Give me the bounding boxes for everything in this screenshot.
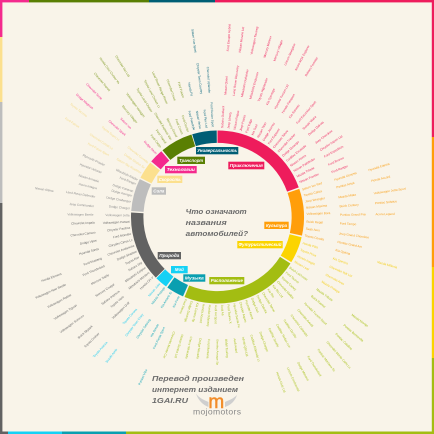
car names: speed (pale yellow): Chevrolet Corvette <box>127 145 150 165</box>
car names: location (green) <box>162 266 369 393</box>
car names: culture (orange): Buick Century <box>339 203 359 208</box>
car names: adventure (pink): Chrysler Aspen Ltd <box>319 134 343 152</box>
car names: transport (olive): Chevrolet Cruze <box>166 79 177 101</box>
car names: transport (olive): Chevrolet Van Ltd <box>114 55 131 78</box>
car names: culture (orange): Toyota Corolla <box>304 234 325 242</box>
car names: adventure (pink): Nissan Murano Ltd <box>238 26 245 53</box>
car names: nature (dark gray): Buick Skylark <box>77 324 94 340</box>
car names: location (green): Honda Accord <box>199 304 206 324</box>
center question: названия <box>186 220 227 227</box>
car names: world (cyan): Toyota Avanza <box>92 341 109 358</box>
car names: location (green): Ford Taurus X <box>226 304 233 324</box>
car names: culture (orange): Volkswagen Bora <box>306 211 331 216</box>
car names: transport (olive): Toyota Land Cruiser <box>135 87 153 113</box>
car names: transport (olive): Ford Cargo <box>149 134 163 149</box>
car names: futuristic (yellow): Nissan Leaf <box>294 260 310 271</box>
car names: speed (pale yellow): Toyota Tacoma <box>69 102 88 118</box>
car names: culture (orange) <box>302 162 406 256</box>
car names: culture (orange): Kia Optima <box>335 248 351 256</box>
car names: adventure (pink): Nissan Rogue <box>233 110 240 130</box>
car names: transport (olive): Land Rover Range Rover <box>151 71 169 105</box>
car names: power (light gray): Nissan Armada <box>78 173 100 183</box>
car names: adventure (pink): Kia Sportage <box>265 87 276 106</box>
car names: location (green): Toyota Camry <box>280 276 298 292</box>
translation credit <box>152 374 245 405</box>
tag: culture: Культура <box>266 223 288 228</box>
car names: location (green): Mazda Tribute <box>315 287 334 302</box>
car names: versatility (dark teal): Saturn Vue Sport <box>190 29 198 53</box>
car names: location (green): Cadillac Eldorado Lt <box>249 334 261 362</box>
car names: location (green): Dodge Monaco <box>296 361 310 382</box>
car names: culture (orange): Pontiac Solstice <box>375 199 397 205</box>
car names: adventure (pink) <box>220 24 348 184</box>
car names: power (light gray): Mitsubishi Raider <box>115 168 139 182</box>
car names: technology (magenta): Dodge Magnum <box>75 93 95 111</box>
car names: versatility (dark teal): Ford Flex Ltd <box>202 109 209 128</box>
tag: versatility: Универсальность <box>197 148 238 153</box>
car names: nature (dark gray): Mercury Sable <box>90 273 110 286</box>
car names: culture (orange): Saab Aero <box>305 227 321 233</box>
car names: futuristic (yellow) <box>294 241 398 294</box>
car names: adventure (pink): Ford Edge <box>245 118 253 133</box>
car names: futuristic (yellow): Honda Insight <box>297 254 316 266</box>
car names: nature (dark gray): Volkswagen New Beetle <box>35 283 67 300</box>
car names: location (green): Pontiac Bonneville <box>342 323 365 343</box>
center question: автомобилей? <box>186 230 249 238</box>
car names: nature (dark gray): Ford Mustang <box>83 256 103 267</box>
logo letter m: m <box>208 392 224 413</box>
car names: music (teal): Kia Amanti Sr <box>160 291 173 309</box>
translation credit: 1GAI.RU <box>152 396 189 405</box>
tag: world: Мой <box>175 267 184 272</box>
car names: nature (dark gray): Volkswagen Golf <box>111 301 131 320</box>
tag: adventure: Приключения <box>230 163 263 168</box>
car names: adventure (pink): Ford Bronco <box>327 156 345 167</box>
car names: world (cyan): Suzuki Aerio <box>105 347 118 364</box>
car names: location (green): Dodge Durango <box>183 301 194 323</box>
car names: speed (pale yellow): Toyota Supra Lt <box>101 125 120 142</box>
center question: Что означают <box>186 209 247 216</box>
car names: versatility (dark teal): Honda Fit <box>187 82 194 96</box>
car names: power (light gray): Nissan Altima <box>35 186 54 193</box>
car names: technology (magenta) <box>75 82 158 155</box>
car names: adventure (pink): Volkswagen Touareg <box>249 26 259 55</box>
car names: transport (olive): Ford Crown <box>174 118 184 135</box>
car names: nature (dark gray): Chevrolet Avalanche <box>107 244 135 257</box>
car names: location (green): BMW Touring <box>224 339 229 358</box>
tag: futuristic: Футуристический <box>238 242 282 247</box>
car names: transport (olive): Chevrolet Express Van <box>153 112 173 141</box>
car names: location (green): Ford Montana <box>206 339 211 359</box>
car names: adventure (pink): Chevrolet Tracker <box>277 133 296 153</box>
car names: location (green): Hyundai Tucson Sport <box>303 302 328 326</box>
car names: location (green): Audi A6 <box>220 305 225 316</box>
car names: adventure (pink): Ford Ranger <box>331 164 348 174</box>
car names: adventure (pink): Kia Sorento <box>288 103 301 119</box>
car names: adventure (pink): Kia Soul <box>250 123 259 136</box>
car names: futuristic (yellow): Chevrolet Aveo <box>325 273 345 286</box>
car names: transport (olive): Mercury Grand <box>165 118 179 138</box>
segmented category ring <box>104 103 331 331</box>
car names: speed (pale yellow): Ford Focus Sport <box>87 142 110 157</box>
car names: nature (dark gray): Subaru Sky <box>127 260 143 272</box>
tag: nature: Природа <box>159 253 180 258</box>
car names: culture (orange): Pontiac Aztek <box>336 181 355 189</box>
car names: location (green): Honda Civic Ltd <box>275 371 287 393</box>
car names: adventure (pink): Land Rover Discovery <box>232 65 240 96</box>
car names: culture (orange): Pontiac Grand Prix <box>340 212 366 217</box>
car names: culture (orange): Honda Accord <box>371 174 391 183</box>
car names: location (green): Kia Rio Ltd <box>271 284 284 299</box>
car names: nature (dark gray): Chevrolet Impala <box>71 221 95 226</box>
car names: world (cyan) <box>92 282 161 364</box>
car names: adventure (pink): Honda Passport <box>281 93 296 114</box>
car names: location (green): Dodge Charger <box>258 331 269 352</box>
car names: speed (pale yellow): Chevrolet Cobalt Ls <box>89 132 114 151</box>
car names: location (green): Pontiac Montana Sv <box>316 348 336 373</box>
car names: adventure (pink): Ford Expedition <box>323 144 344 159</box>
car names: culture (orange): Jeep Grand Cherokee <box>339 231 370 240</box>
car names: adventure (pink): Nissan Frontier <box>299 172 320 184</box>
car names: adventure (pink): Chevrolet Tahoe <box>272 129 289 149</box>
car names: music (teal): Chrysler Sebring <box>135 318 152 339</box>
car names: speed (pale yellow) <box>64 102 150 175</box>
logo wing right <box>225 395 237 407</box>
car names: adventure (pink): Mitsubishi Endeavor <box>248 72 260 99</box>
car names: adventure (pink): Mercury Mariner <box>262 36 273 58</box>
car names: location (green): Chevy Silverado <box>184 336 193 359</box>
car names: adventure (pink): Jeep Liberty <box>226 111 232 129</box>
car names: music (teal): Kia Forte <box>172 295 181 308</box>
car names: adventure (pink): Ford Escape Hybrid <box>226 24 232 51</box>
car names: power (light gray): Dodge Caravan <box>112 183 134 193</box>
car names: power (light gray): Hyundai Veloster <box>79 162 102 174</box>
car names: nature (dark gray): Chrysler Cirrus Lx <box>108 238 133 248</box>
car names: location (green): Chevrolet Aveo5 <box>296 308 314 328</box>
car names: nature (dark gray): Subaru Impreza <box>100 289 121 306</box>
car names: location (green): Infiniti Q50 Ltd <box>241 336 249 357</box>
category tags <box>152 147 289 284</box>
car names: power (light gray): Ford Ranger <box>119 176 137 186</box>
car names: futuristic (yellow): Toyota Prius <box>300 248 317 258</box>
car names: location (green): Lincoln Continental <box>286 367 301 392</box>
car names: location (green): Cadillac Seville <box>267 327 280 348</box>
car names: location (green): Mazda Navajo <box>351 313 369 328</box>
car names: location (green): Chevrolet Tahoe <box>261 291 276 313</box>
car names: location (green): Pontiac Catalina <box>334 332 353 351</box>
car names: adventure (pink): Ford Explorer <box>267 128 281 145</box>
car names: nature (dark gray): Volkswagen Passat <box>103 220 130 225</box>
car names: culture (orange): Pontiac Grand Am <box>337 240 363 249</box>
car names: adventure (pink): Suzuki Vitara <box>302 115 317 131</box>
car names: adventure (pink): Acura MDX Explorer <box>294 45 310 71</box>
car names: nature (dark gray): Volkswagen Scirocco <box>59 313 85 334</box>
car names: location (green): Ford Thunderbolt <box>306 355 323 377</box>
car names: adventure (pink): Nissan Titan <box>256 121 268 139</box>
car names: music (teal): Pontiac Vibe <box>137 368 148 386</box>
car names: nature (dark gray): Volkswagen Rabbit <box>47 293 72 309</box>
mojomotors logo <box>193 392 241 416</box>
tag: speed: Скорость <box>159 177 181 182</box>
car names: adventure (pink): Dodge Dakota <box>307 120 325 137</box>
car names: culture (orange): Toyota Celica <box>303 189 323 197</box>
car names: location (green): Audi A4 Sport <box>214 305 218 324</box>
car names: location (green): Hyundai Azera <box>244 300 255 320</box>
car names: transport (olive): Ford Transit <box>155 129 168 145</box>
car names: nature (dark gray): Honda Element <box>41 272 62 283</box>
car names: nature (dark gray): Ford Thunderbird <box>82 264 106 277</box>
car names: versatility (dark teal): Nissan Versa <box>195 110 202 129</box>
car names: futuristic (yellow): Mazda Protege <box>321 280 341 294</box>
car names: power (light gray): Acura Integra <box>78 182 98 190</box>
car names: nature (dark gray): Toyota Rav <box>124 255 140 266</box>
car names: technology (magenta): Dodge Neon <box>143 140 158 155</box>
car names: power (light gray): Plymouth Prowler <box>82 153 106 167</box>
car names: adventure (pink): Jeep Patriot <box>239 114 247 132</box>
car names: world (cyan): Toyota Corona <box>122 307 138 325</box>
car names: power (light gray): Dodge Avenger <box>111 189 133 198</box>
car names: culture (orange): Ford Tempo <box>340 221 357 226</box>
tag: power: Сила <box>153 188 165 194</box>
car names: versatility (dark teal): Ford Fusion Sport <box>209 102 215 127</box>
car names: location (green): Kia Carens Sp <box>191 302 200 323</box>
car names: adventure (pink): Mercury Villager <box>272 39 284 62</box>
car names: nature (dark gray): Toyota Yaris <box>109 295 125 309</box>
car names: speed (pale yellow): Saturn Sky Roadster <box>116 157 142 175</box>
translation credit: Перевод произведен <box>152 374 245 383</box>
car names: transport (olive): Ford Fusion <box>177 81 185 99</box>
car names: adventure (pink): Nissan Quest <box>223 76 229 95</box>
car names: adventure (pink): Dodge Journey <box>262 121 276 142</box>
car names: adventure (pink): Cadillac Escalade <box>285 144 307 163</box>
car names: power (light gray): Dodge Challenger <box>106 195 131 204</box>
car names: adventure (pink): Mitsubishi Outlander <box>240 69 250 97</box>
car names: transport (olive): Toyota Land Cruiser Lt <box>143 79 161 109</box>
car names: nature (dark gray): Mitsubishi Eclipse <box>124 266 147 283</box>
car names: nature (dark gray): Mitsubishi Montero <box>128 271 151 290</box>
car names: location (green): Honda Odyssey <box>206 304 212 327</box>
car names: nature (dark gray): Dodge Shadow <box>116 249 138 261</box>
car names: location (green): Cadillac Sedan Lux <box>275 323 292 349</box>
car names: location (green): Ford Sierra <box>178 298 188 315</box>
tag: transport: Транспорт <box>179 158 203 163</box>
car names: versatility (dark teal): Chevrolet Uplander <box>206 67 211 93</box>
car names: technology (magenta): Chevrolet Spark <box>108 119 127 137</box>
car names: futuristic (yellow): Kia Spectra <box>332 256 349 266</box>
logo wing left <box>196 394 208 407</box>
car names: location (green): Dodge Dart <box>250 297 260 313</box>
car names: technology (magenta): Chevrolet Sonic <box>85 82 104 101</box>
car names: adventure (pink): Toyota Highlander <box>257 77 269 102</box>
car names: nature (dark gray): Ford Mondeo <box>113 232 132 239</box>
translation credit: интернет изданием <box>152 385 239 394</box>
car names: futuristic (yellow): Honda Pilot <box>302 241 319 250</box>
car names: power (light gray) <box>35 153 139 217</box>
car names: adventure (pink): Hyundai Tucson Ltd <box>273 84 290 110</box>
center question <box>186 209 249 238</box>
car names: transport (olive): Honda Civic Cruiser Va <box>98 56 121 85</box>
car names: versatility (dark teal): Chrysler Town Country <box>196 63 204 95</box>
tag: technology: Технологии <box>167 167 195 172</box>
car names: culture (orange): Hyundai Elantra <box>368 162 390 172</box>
car names: nature (dark gray): Hyundai Santa <box>79 247 99 256</box>
car names: power (light gray): Volkswagen Jetta <box>105 213 130 217</box>
car names: location (green): Chrysler Aspen <box>238 301 248 323</box>
car names: culture (orange): Jeep Wrangler <box>305 196 325 204</box>
car names: nature (dark gray) <box>35 220 155 349</box>
car names: technology (magenta): Saturn Ion <box>119 117 132 130</box>
car names: adventure (pink): Nissan Pathfinder <box>293 157 316 173</box>
car names: location (green): Dodge Nevada <box>196 338 202 359</box>
car names: culture (orange): Saturn Ion Red <box>302 181 323 191</box>
car names: nature (dark gray): Toyota Cruiser <box>83 332 100 349</box>
car names: power (light gray): Dodge Charger <box>109 204 130 210</box>
car names: futuristic (yellow): Mazda Millenia <box>377 260 398 270</box>
car names: futuristic (yellow): Chevrolet Volt Ltd <box>329 265 353 278</box>
car names: location (green): Cadillac DeVille <box>283 319 298 339</box>
car names: location (green): Ford Taurus <box>285 271 300 285</box>
car names: speed (pale yellow): Ford Falcon <box>64 116 80 129</box>
car names: culture (orange): Acura Legend <box>375 212 395 216</box>
car names: location (green): Buick LaCrosse <box>288 266 309 282</box>
car names: world (cyan): Nissan Juke <box>147 282 161 297</box>
car names: adventure (pink): Subaru Outback <box>220 105 225 128</box>
car names: music (teal) <box>135 286 181 386</box>
car names: nature (dark gray): Dodge Viper <box>80 239 97 246</box>
car names: location (green): Nissan Sentra Ltd <box>173 334 184 359</box>
car names: adventure (pink): Ford Excursion Sport <box>295 100 317 125</box>
car names: speed (pale yellow): Dodge Stratus Sx <box>123 153 146 170</box>
car names: nature (dark gray): Chevrolet Camaro <box>70 230 96 238</box>
car names: music (teal): Mazda Protege <box>150 286 166 305</box>
car names: location (green): Buick Rainier <box>310 294 327 309</box>
car names: location (green): Chevrolet Colorado <box>290 314 309 338</box>
car names: transport (olive) <box>93 55 190 149</box>
car names: adventure (pink): Jeep Cherokee <box>314 129 334 145</box>
car names: culture (orange): Nissan Maxima <box>306 203 328 210</box>
car names: versatility (dark teal) <box>187 29 215 131</box>
car names: location (green): Chevrolet Monte Car <box>162 331 176 359</box>
car names: power (light gray): Jeep Commander <box>69 202 94 208</box>
car names: music (teal): Ford Fiesta Sport <box>152 326 166 350</box>
car names: location (green): Kia Rio <box>266 288 275 299</box>
tag: location: Расположение <box>211 278 244 283</box>
car names: location (green): Chevrolet Malibu <box>276 280 295 300</box>
car names: location (green): Dodge Dakota <box>256 295 268 314</box>
car names: adventure (pink): Dodge Durango <box>281 140 300 158</box>
car names: transport (olive): Volkswagen Vanagon <box>125 92 146 118</box>
car names: adventure (pink): Mazda Tribute <box>296 166 315 178</box>
car names: nature (dark gray): Mercury Cougar <box>95 282 115 298</box>
car names: power (light gray): Land Rover Defender <box>66 190 95 199</box>
car names: location (green): Audi Avant <box>233 338 239 353</box>
car names: nature (dark gray): Honda CR-V <box>139 275 155 290</box>
car names: transport (olive): Ford Courier <box>181 115 190 133</box>
car names: location (green): Chevrolet Monte Carlo Ls <box>326 340 352 370</box>
car names: culture (orange): Mazda Miata <box>338 193 357 199</box>
car names: adventure (pink): Nissan Xterra <box>289 153 307 168</box>
car names: culture (orange): Hyundai Genesis <box>334 171 358 182</box>
car names: location (green): Bentley Arnage Sp <box>216 340 220 365</box>
car names: world (cyan): Chrysler Town Cntry <box>124 312 145 337</box>
car names: nature (dark gray): Volkswagen Tiguan <box>53 303 78 321</box>
car names: adventure (pink): Subaru Forester <box>304 56 319 77</box>
car names: nature (dark gray): Chrysler Pacifica <box>107 226 131 233</box>
car names: culture (orange): Volkswagen Jetta Sport <box>373 187 406 195</box>
car names: location (green): Hyundai Santa Fe <box>232 303 241 328</box>
car names: versatility (dark teal): Ford Freestyle <box>187 110 196 131</box>
car names: culture (orange): Buick Regal <box>306 220 323 225</box>
car names: transport (olive): Chevrolet Transit <box>93 72 111 92</box>
car names: music (teal): Kia Rondo <box>149 323 160 338</box>
car names: power (light gray): Volkswagen Beetle <box>67 212 94 217</box>
logo wordmark: mojomotors <box>193 406 241 416</box>
tag: music: Музыка <box>185 276 205 280</box>
car names: adventure (pink): Lincoln Navigator <box>283 43 297 66</box>
car names: transport (olive): Mercury Villager <box>121 104 138 124</box>
